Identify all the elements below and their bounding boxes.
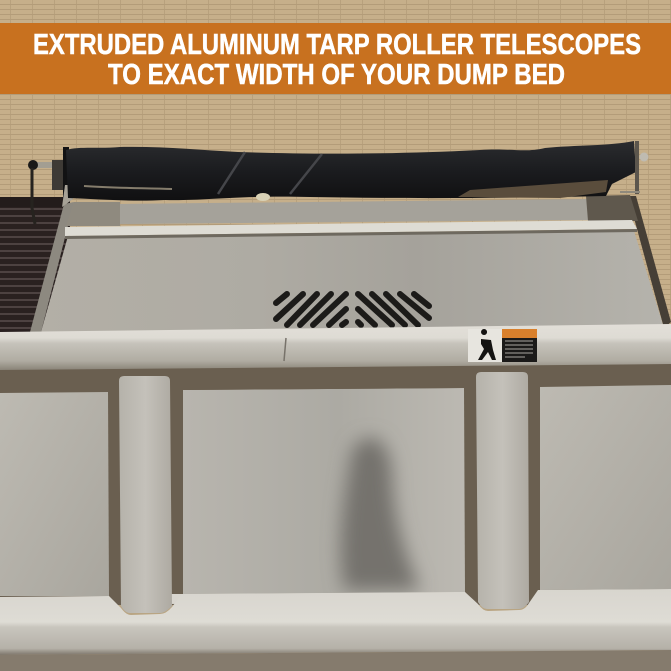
brick wall background: [0, 0, 671, 340]
tarp stitching seam: [84, 186, 172, 189]
post right: [476, 372, 529, 609]
bottom edge of the truck: [0, 650, 671, 671]
upper plate: [120, 199, 588, 224]
left light edge: [30, 202, 74, 332]
top rail: [0, 324, 671, 370]
left corner bracket: [66, 202, 120, 226]
reflection shadow on panel: [341, 438, 420, 590]
icon: vent slots: [276, 294, 429, 325]
light rail: [65, 220, 637, 236]
bottom rail: [0, 589, 671, 655]
post left: [119, 376, 172, 613]
icon: falling person: [478, 329, 496, 360]
right dark edge: [628, 196, 671, 328]
tarp straps: [218, 152, 322, 194]
black rolled tarp: [66, 141, 636, 201]
main sheet: [41, 231, 664, 332]
right panel: [540, 385, 671, 590]
highlight below roller: [256, 193, 270, 201]
warning text panel: [502, 329, 537, 362]
lower body recess: [0, 362, 671, 605]
tarp mesh edge: [458, 180, 608, 198]
roller left end hardware: [28, 147, 73, 224]
dump bed tailgate sheet: [30, 195, 671, 332]
tarp roller: [28, 141, 648, 224]
dark building siding at left: [0, 197, 70, 333]
orange title banner: TO EXACT WIDTH OF YOUR DUMP BED: [108, 59, 565, 91]
warning label: [468, 329, 537, 362]
left panel: [0, 392, 109, 596]
center panel: [170, 370, 470, 604]
orange title banner: [0, 23, 671, 94]
roller right end hardware: [620, 141, 648, 194]
right corner bracket: [586, 195, 638, 221]
